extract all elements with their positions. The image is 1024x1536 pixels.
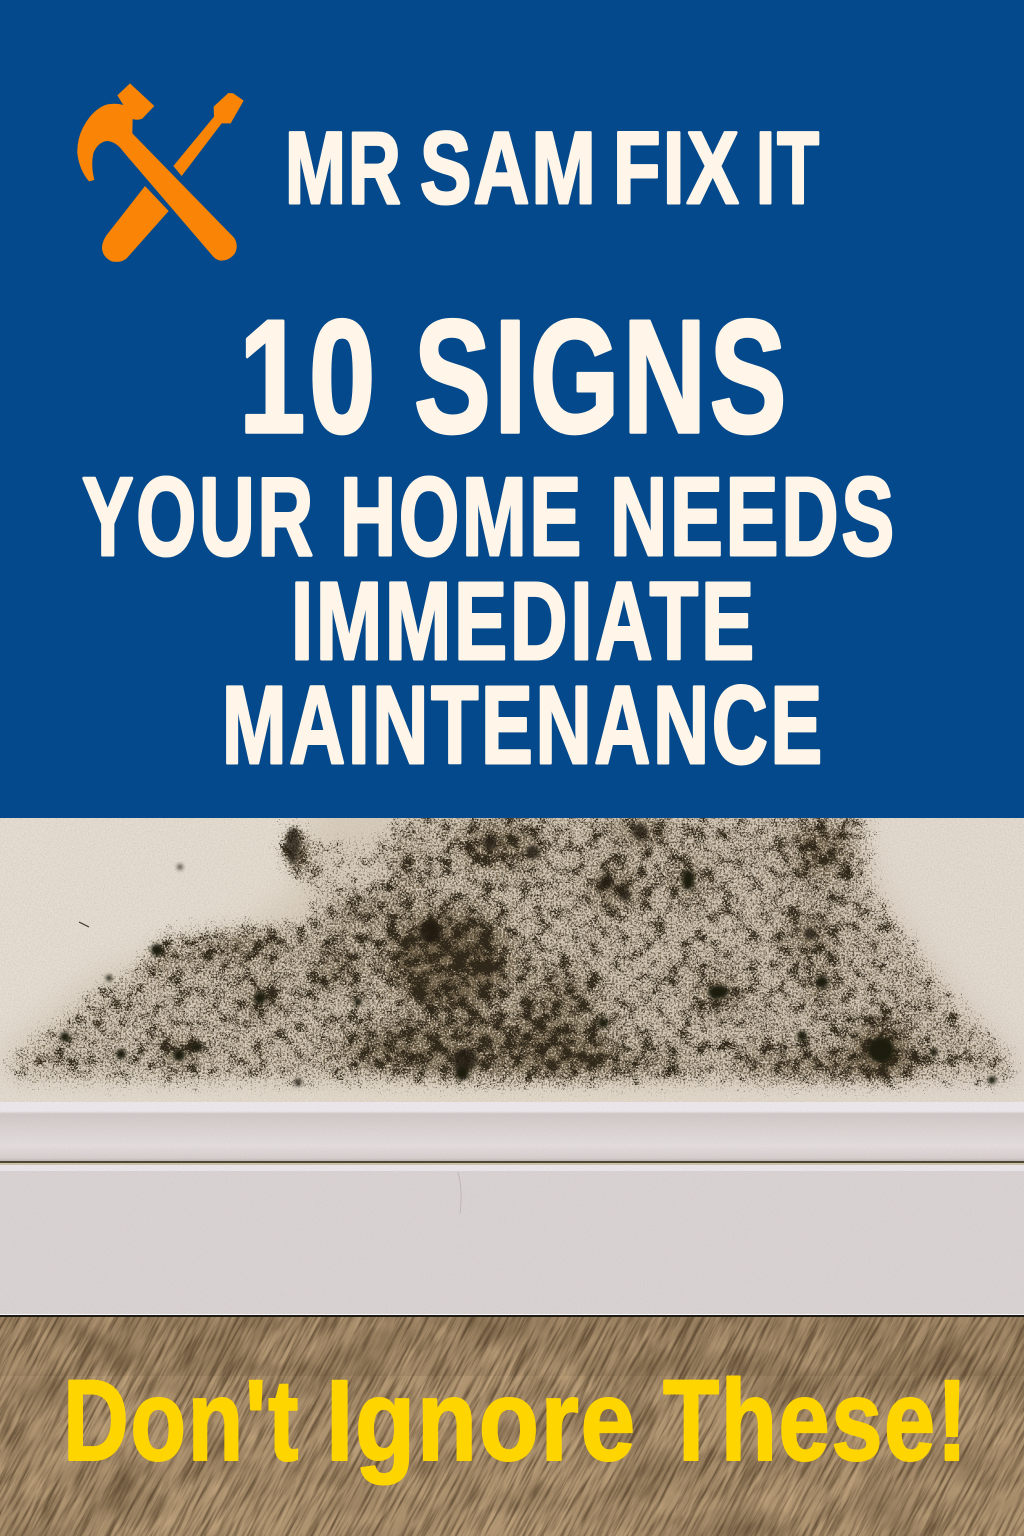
title line: your home needs: YOUR: [82, 455, 316, 579]
photo: wooden floor: [0, 1315, 1024, 1536]
floor tone top: [0, 1316, 1024, 1376]
dark mold spots: [60, 824, 996, 1086]
baseboard: moulding and panel: [0, 1102, 1024, 1315]
wood grain light: [0, 1316, 1024, 1536]
title line: immediate: IMMEDIATE: [291, 560, 757, 683]
title line: your home needs: HOME: [340, 455, 584, 579]
icon part: hammer: [77, 83, 237, 261]
gap cream strip: [0, 1163, 1024, 1165]
icon part: screwdriver handle: [102, 186, 169, 262]
brand name: SAM: [420, 111, 598, 225]
mold soft speckle: [0, 800, 1024, 1102]
baseboard panel: [0, 1165, 1024, 1314]
wall grain: [0, 818, 1024, 1102]
moulding: [0, 1102, 1024, 1162]
brand name: FIX: [613, 111, 741, 225]
panel crack: [458, 1172, 461, 1214]
floor base: [0, 1316, 1024, 1536]
mold haze: [1, 818, 1021, 1086]
wood grain dark: [0, 1316, 1024, 1536]
brand name: MR: [285, 111, 403, 225]
title line: your home needs: NEEDS: [610, 455, 897, 579]
wall surface: [0, 818, 1024, 1102]
hairline scratch: [79, 922, 89, 927]
photo: moldy wall above baseboard: [0, 818, 1024, 1102]
moulding shadow gap: [0, 1161, 1024, 1163]
title: 10 signs: 10: [239, 287, 379, 467]
panel bottom edge: [0, 1314, 1024, 1315]
wood dark patches: [0, 1316, 1024, 1536]
icon part: screwdriver blade: [173, 93, 244, 176]
floor edge shadow: [0, 1315, 1024, 1317]
mold dark speckle: [0, 800, 1024, 1102]
panel grain: [0, 1171, 1024, 1314]
call to action: Don't: [63, 1357, 300, 1485]
title: 10 signs: SIGNS: [414, 287, 790, 467]
panel: blue header background: [0, 0, 1024, 818]
icon: crossed hammer and screwdriver: [77, 83, 244, 262]
call to action: Ignore: [326, 1357, 637, 1485]
panel highlight: [0, 1165, 1024, 1171]
brand name: IT: [756, 111, 821, 225]
